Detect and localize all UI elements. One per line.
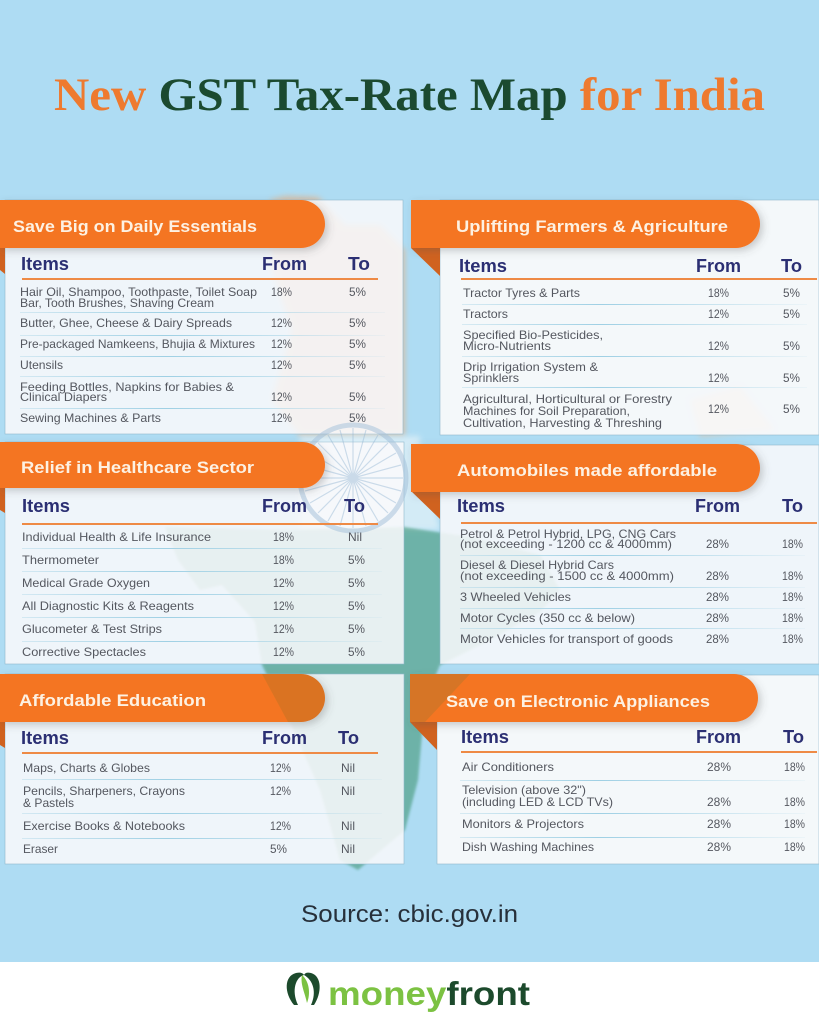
card [440,445,819,664]
table rows: 12% [271,390,292,404]
table rows: (not exceeding - 1200 cc & 4000mm) [460,537,672,551]
table rows: 18% [271,285,292,299]
table rows: 5% [348,576,365,590]
banner: Save on Electronic Appliances [446,692,710,711]
table rows: 18% [782,537,803,551]
table rows: Monitors & Projectors [462,817,584,831]
table rows: Drip Irrigation System & [463,360,598,374]
table rows: 5% [348,599,365,613]
table rows [460,527,805,646]
table header: Items [459,256,507,276]
table rows: 5% [348,553,365,567]
table rows: Nil [348,530,362,544]
table rows: Hair Oil, Shampoo, Toothpaste, Toilet Soap [20,285,257,299]
table rows: Machines for Soil Preparation, [463,404,630,418]
banner: Save Big on Daily Essentials [13,217,257,236]
table rows: 28% [707,760,731,774]
table rows: Micro-Nutrients [463,339,551,353]
panel: Affordable Education [0,674,404,864]
table header [21,728,378,754]
table rows: Thermometer [22,553,99,567]
table rows: Motor Vehicles for transport of goods [460,632,673,646]
panel: Automobiles made affordable [411,444,819,664]
table rows: 5% [783,402,800,416]
table rows: 18% [782,590,803,604]
banner [411,444,760,492]
table rows: 5% [349,337,366,351]
footer band [0,962,819,1024]
table rows: Butter, Ghee, Cheese & Dairy Spreads [20,316,232,330]
table rows: 5% [783,371,800,385]
table rows: 18% [784,817,805,831]
panel: Relief in Healthcare Sector [0,425,406,664]
table rows: 18% [782,611,803,625]
table header [21,254,378,280]
banner [0,442,325,488]
table rows: 18% [273,530,294,544]
table rows: Petrol & Petrol Hybrid, LPG, CNG Cars [460,527,676,541]
table rows: 12% [270,761,291,775]
table header [459,256,817,280]
banner: Automobiles made affordable [457,461,717,480]
table header: From [696,256,741,276]
table rows: 5% [349,390,366,404]
table header: Items [21,728,69,748]
table header: From [262,254,307,274]
table rows: Dish Washing Machines [462,840,594,854]
source line: Source: cbic.gov.in [301,901,518,928]
card [437,675,819,864]
table header [457,496,817,524]
banner: Affordable Education [19,691,206,710]
table rows: 12% [273,622,294,636]
panel: Save Big on Daily Essentials [0,200,403,434]
table rows: 18% [273,553,294,567]
table rows: 18% [784,840,805,854]
table header: To [783,727,804,747]
table rows: 5% [270,842,287,856]
banner [0,674,325,722]
table header: From [696,727,741,747]
table rows: Nil [341,819,355,833]
card [5,674,404,864]
table rows: Sprinklers [463,371,519,385]
table rows: Tractors [463,307,508,321]
table rows: Bar, Tooth Brushes, Shaving Cream [20,296,214,310]
table rows: 12% [273,645,294,659]
table rows: 12% [273,599,294,613]
table rows: 12% [271,316,292,330]
table rows: 12% [270,819,291,833]
table header: To [348,254,370,274]
table rows: Maps, Charts & Globes [23,761,150,775]
banner [0,200,325,248]
table rows: 18% [782,569,803,583]
table rows [20,285,385,425]
table rows: 5% [348,645,365,659]
table rows: 5% [783,307,800,321]
table rows: 28% [706,611,729,625]
table header: To [781,256,802,276]
table rows: 5% [349,411,366,425]
banner: Uplifting Farmers & Agriculture [456,217,728,236]
table rows: 28% [707,817,731,831]
table rows: Feeding Bottles, Napkins for Babies & [20,380,234,394]
table rows: 18% [782,632,803,646]
table header: Items [457,496,505,516]
table rows: Individual Health & Life Insurance [22,530,211,544]
table header: Items [21,254,69,274]
panel: Save on Electronic Appliances [410,674,819,864]
table header: From [262,728,307,748]
table rows: Glucometer & Test Strips [22,622,162,636]
table rows: Cultivation, Harvesting & Threshing [463,416,662,430]
table rows: Pre-packaged Namkeens, Bhujia & Mixtures [20,337,255,351]
banner fold [0,720,5,748]
table rows: 12% [273,576,294,590]
banner fold [0,245,5,274]
table rows: 28% [706,537,729,551]
background map of India [165,196,775,870]
table rows: 12% [708,339,729,353]
table header: From [262,496,307,516]
table rows: 5% [348,622,365,636]
banner [410,674,758,722]
logo: moneyfront [287,973,530,1012]
table header [22,496,378,525]
table rows: Television (above 32") [462,783,586,797]
table header: To [782,496,803,516]
table rows: 28% [706,632,729,646]
table rows: Motor Cycles (350 cc & below) [460,611,635,625]
table rows: 28% [706,590,729,604]
card [5,200,403,434]
table header: To [338,728,359,748]
table rows: Nil [341,842,355,856]
table rows: 5% [349,358,366,372]
banner [411,200,760,248]
banner: Relief in Healthcare Sector [21,458,254,477]
table rows: 12% [708,307,729,321]
card [5,442,404,664]
table header: To [344,496,365,516]
banner fold [410,722,437,750]
table rows [22,761,382,856]
table rows: Diesel & Diesel Hybrid Cars [460,558,614,572]
table header: Items [461,727,509,747]
card [440,200,819,435]
table rows: Medical Grade Oxygen [22,576,150,590]
table rows: Sewing Machines & Parts [20,411,161,425]
table header: From [695,496,740,516]
table rows: (including LED & LCD TVs) [462,795,613,809]
table rows: 12% [708,371,729,385]
banner fold [411,491,440,519]
table rows: 18% [784,795,805,809]
table header [461,727,817,753]
table header: Items [22,496,70,516]
table rows: 5% [783,339,800,353]
table rows: Nil [341,761,355,775]
ashoka chakra [300,425,406,531]
table rows: 28% [707,840,731,854]
table rows: 12% [271,411,292,425]
table rows: Clinical Diapers [20,390,107,404]
table rows: Corrective Spectacles [22,645,146,659]
table rows: Pencils, Sharpeners, Crayons [23,784,185,798]
table rows: 12% [271,358,292,372]
table rows [22,530,382,659]
table rows: All Diagnostic Kits & Reagents [22,599,194,613]
table rows: 5% [349,316,366,330]
icon: leaf arch [287,973,320,1005]
table rows: & Pastels [23,796,74,810]
table rows: Utensils [20,358,63,372]
table rows: 12% [271,337,292,351]
table rows: Eraser [23,842,58,856]
panel: Uplifting Farmers & Agriculture [411,200,819,435]
table rows: 12% [270,784,291,798]
table rows: 12% [708,402,729,416]
wordmark: money front [328,975,530,1012]
table rows: Agricultural, Horticultural or Forestry [463,392,672,406]
table rows: Specified Bio-Pesticides, [463,328,603,342]
table rows: Tractor Tyres & Parts [463,286,580,300]
table rows: 5% [349,285,366,299]
table rows: 28% [707,795,731,809]
table rows: Exercise Books & Notebooks [23,819,185,833]
table rows: Air Conditioners [462,760,554,774]
table rows [460,760,805,854]
title: New GST Tax-Rate Map for India [54,69,765,121]
banner fold [0,487,5,513]
banner fold [411,248,440,276]
table rows: (not exceeding - 1500 cc & 4000mm) [460,569,674,583]
table rows: 18% [708,286,729,300]
table rows: 28% [706,569,729,583]
table rows [462,286,807,430]
table rows: 3 Wheeled Vehicles [460,590,571,604]
table rows: 18% [784,760,805,774]
table rows: 5% [783,286,800,300]
table rows: Nil [341,784,355,798]
